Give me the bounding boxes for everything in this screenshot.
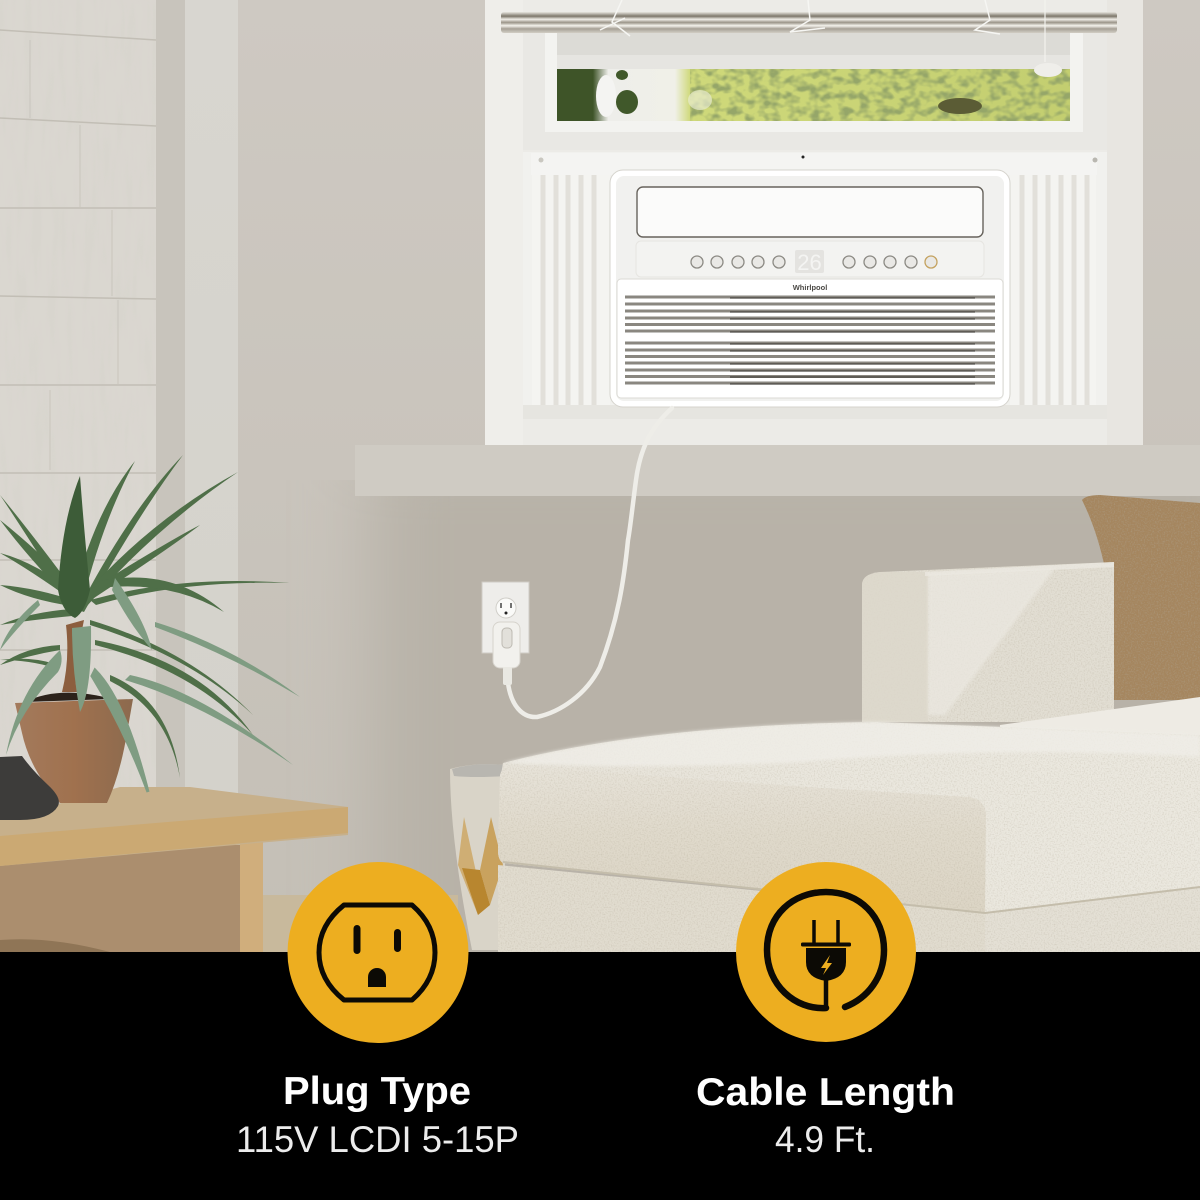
control panel: 26 — [797, 250, 822, 275]
wall outlet — [482, 582, 529, 653]
window frame — [485, 0, 1143, 446]
air conditioner front grille — [617, 279, 1003, 398]
pale leaves — [0, 578, 300, 792]
column trim — [185, 0, 238, 795]
potted plant — [0, 455, 300, 803]
dark leaves — [0, 455, 290, 778]
black footer band — [0, 952, 1200, 1200]
soil and trunk — [25, 693, 112, 702]
pillow — [1082, 495, 1200, 700]
power cord — [508, 408, 672, 717]
window view: foliage — [557, 69, 1070, 121]
control panel — [636, 241, 984, 277]
value: cable length: 4.9 Ft. — [775, 1119, 875, 1160]
value: plug type: 115V LCDI 5-15P — [236, 1119, 519, 1160]
sofa — [450, 562, 1200, 952]
dark ceramic vase — [0, 756, 59, 820]
heading: plug type: Plug Type — [283, 1070, 471, 1113]
floor and table leg area — [263, 895, 458, 952]
side table vase — [450, 764, 505, 950]
air conditioner side panels — [523, 152, 1107, 419]
sofa base — [498, 865, 1200, 952]
icon: outlet — [288, 862, 468, 1043]
air conditioner front grille: Whirlpool — [793, 283, 827, 292]
air conditioner top vent — [637, 187, 983, 237]
right seat cushion — [1000, 697, 1200, 740]
crown — [58, 476, 90, 618]
LCDI plug — [493, 622, 520, 685]
side table — [0, 787, 348, 952]
window sill — [355, 445, 1200, 496]
icon: plug with coiled cable — [736, 862, 916, 1042]
air conditioner unit — [610, 170, 1010, 407]
window blind — [501, 0, 1117, 77]
sofa seat cushion — [498, 722, 1200, 913]
sofa back arm — [862, 562, 1114, 722]
heading: cable length: Cable Length — [696, 1071, 955, 1114]
plant pot — [15, 699, 133, 803]
brick wall panel — [0, 0, 185, 800]
